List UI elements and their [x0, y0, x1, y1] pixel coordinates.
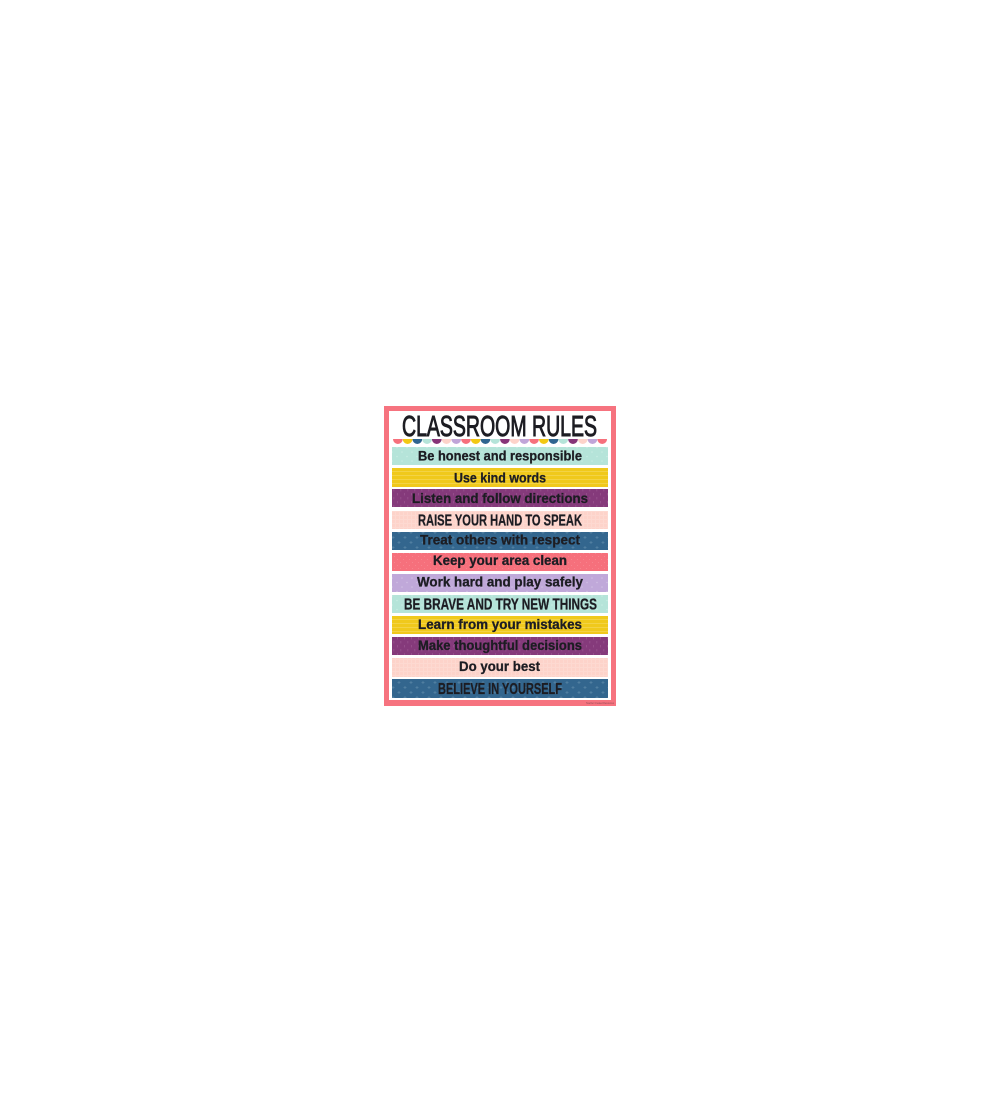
rule 6 — [392, 553, 608, 571]
rule 4: RAISE YOUR HAND TO SPEAK — [418, 512, 583, 530]
publisher credit: Teacher Created Resources — [586, 702, 615, 705]
rule 3: Listen and follow directions — [412, 491, 588, 506]
rule 5 — [392, 532, 608, 550]
rule 3 — [392, 489, 608, 507]
rule 5: Treat others with respect — [420, 532, 580, 548]
rule 2 — [392, 468, 608, 487]
rule 9 — [392, 616, 608, 634]
rule 10: Make thoughtful decisions — [418, 638, 582, 653]
rule 11: Do your best — [459, 659, 540, 674]
rule 1: Be honest and responsible — [418, 448, 582, 464]
poster frame — [384, 406, 616, 706]
rule 8: BE BRAVE AND TRY NEW THINGS — [404, 596, 597, 614]
rule 10 — [392, 637, 608, 655]
rule 6: Keep your area clean — [433, 553, 567, 568]
rule 2: Use kind words — [454, 470, 546, 486]
rule 1 — [392, 447, 608, 465]
title: CLASSROOM RULES — [402, 411, 597, 443]
rule 4 — [392, 511, 608, 530]
rule 7 — [392, 574, 608, 592]
rule 11 — [392, 658, 608, 677]
rule 12: BELIEVE IN YOURSELF — [438, 681, 562, 698]
rule 12 — [392, 679, 608, 698]
rule 7: Work hard and play safely — [417, 574, 583, 590]
scalloped bunting — [393, 439, 607, 444]
rule 9: Learn from your mistakes — [418, 617, 582, 632]
